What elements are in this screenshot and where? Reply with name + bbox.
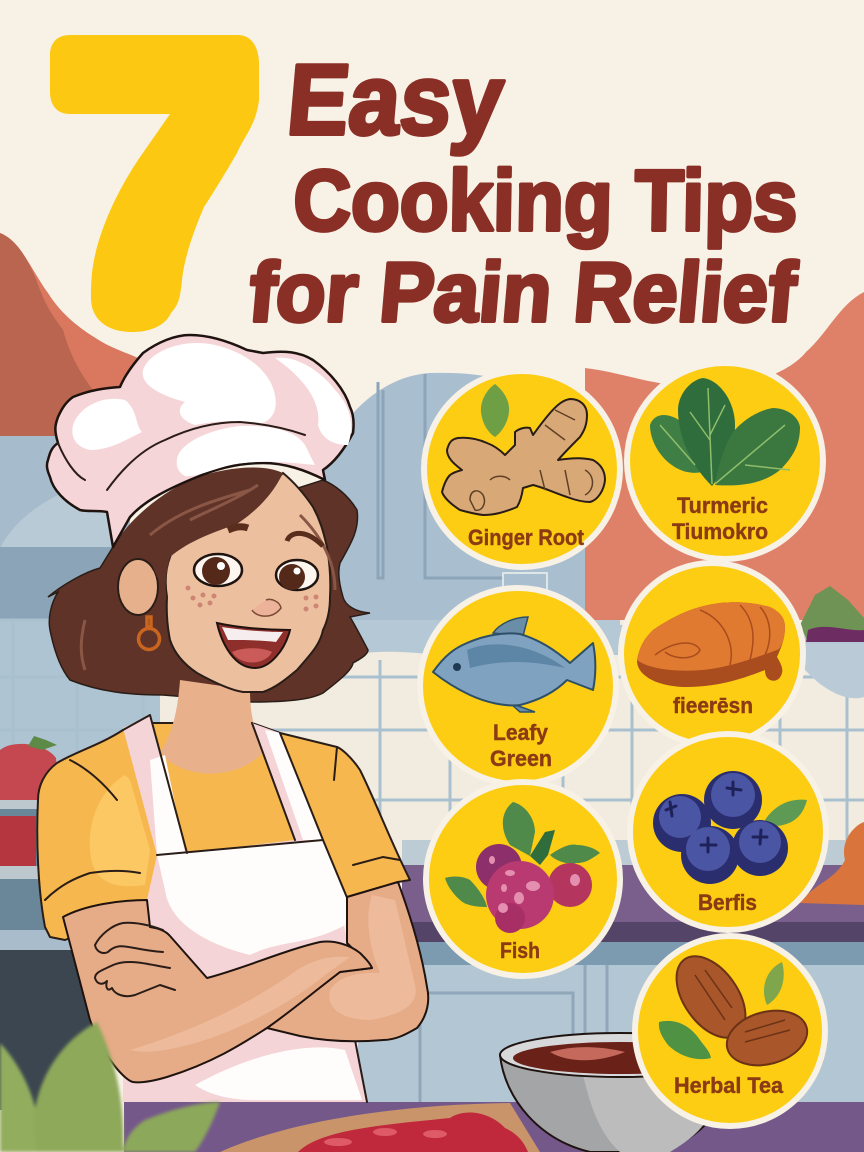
big number 7 <box>50 35 259 332</box>
shirt highlight <box>90 775 150 886</box>
label: Leafy <box>493 720 549 745</box>
circle: Berries <box>630 734 826 930</box>
title <box>245 44 801 339</box>
icon: almonds and leaves <box>659 944 813 1074</box>
icon: raspberries <box>445 802 600 933</box>
label: Herbal Tea <box>674 1073 784 1098</box>
arms <box>63 882 428 1082</box>
hair fringe <box>113 467 283 600</box>
icon: blueberries <box>653 771 807 884</box>
foreground tray with meat <box>220 1103 540 1152</box>
body shirt <box>37 723 410 940</box>
nose <box>252 599 281 616</box>
label: fieerēsn <box>673 693 753 718</box>
circle: Herbal Tea <box>635 936 825 1126</box>
shirt cuffs <box>45 747 400 900</box>
hair back <box>48 480 370 702</box>
ear <box>118 559 158 615</box>
title line: for Pain Relief: for Pain Relief <box>245 245 801 339</box>
label: Fish <box>500 938 540 963</box>
apron <box>123 715 367 1102</box>
hat fold lines <box>58 422 305 490</box>
label second line: Green <box>490 746 552 771</box>
title line: Easy: Easy <box>283 44 508 156</box>
eyes <box>194 527 323 590</box>
earring <box>138 617 160 650</box>
arm: left with hand <box>63 900 372 1082</box>
chef character <box>37 335 428 1102</box>
shelf produce left <box>0 736 57 866</box>
tip circles <box>420 363 826 1126</box>
shelf produce right <box>790 586 864 905</box>
label: Ginger Root <box>468 525 585 550</box>
face <box>166 473 330 692</box>
label: Berfis <box>698 890 757 915</box>
apron outline <box>123 715 367 1102</box>
foreground leaves <box>0 1022 220 1152</box>
label second line: Tiumokro <box>672 519 768 544</box>
circle: Ginger Root <box>424 371 620 567</box>
icon: salmon fillet <box>637 602 785 687</box>
freckles <box>186 586 318 612</box>
hand fingers <box>95 923 175 996</box>
apron white panel <box>150 730 362 1100</box>
label: Turmeric <box>677 493 768 518</box>
icon: fish <box>433 617 595 712</box>
arm: right <box>267 882 428 1041</box>
hair strands <box>81 485 335 670</box>
circle: Leafy Green <box>420 588 616 784</box>
hat highlights <box>72 343 351 476</box>
arm highlights <box>130 895 416 1052</box>
title line: Cooking Tips: Cooking Tips <box>293 153 798 249</box>
icon: green leaves <box>650 378 800 486</box>
chef hat <box>47 335 354 547</box>
kitchen background <box>0 373 864 1152</box>
icon: ginger root <box>442 384 605 515</box>
mouth <box>217 623 290 668</box>
foreground bowl <box>500 1033 740 1152</box>
circle: Fish <box>426 782 620 976</box>
circle: salmon <box>621 563 803 745</box>
neck <box>160 680 265 774</box>
circle: Turmeric <box>627 363 823 559</box>
